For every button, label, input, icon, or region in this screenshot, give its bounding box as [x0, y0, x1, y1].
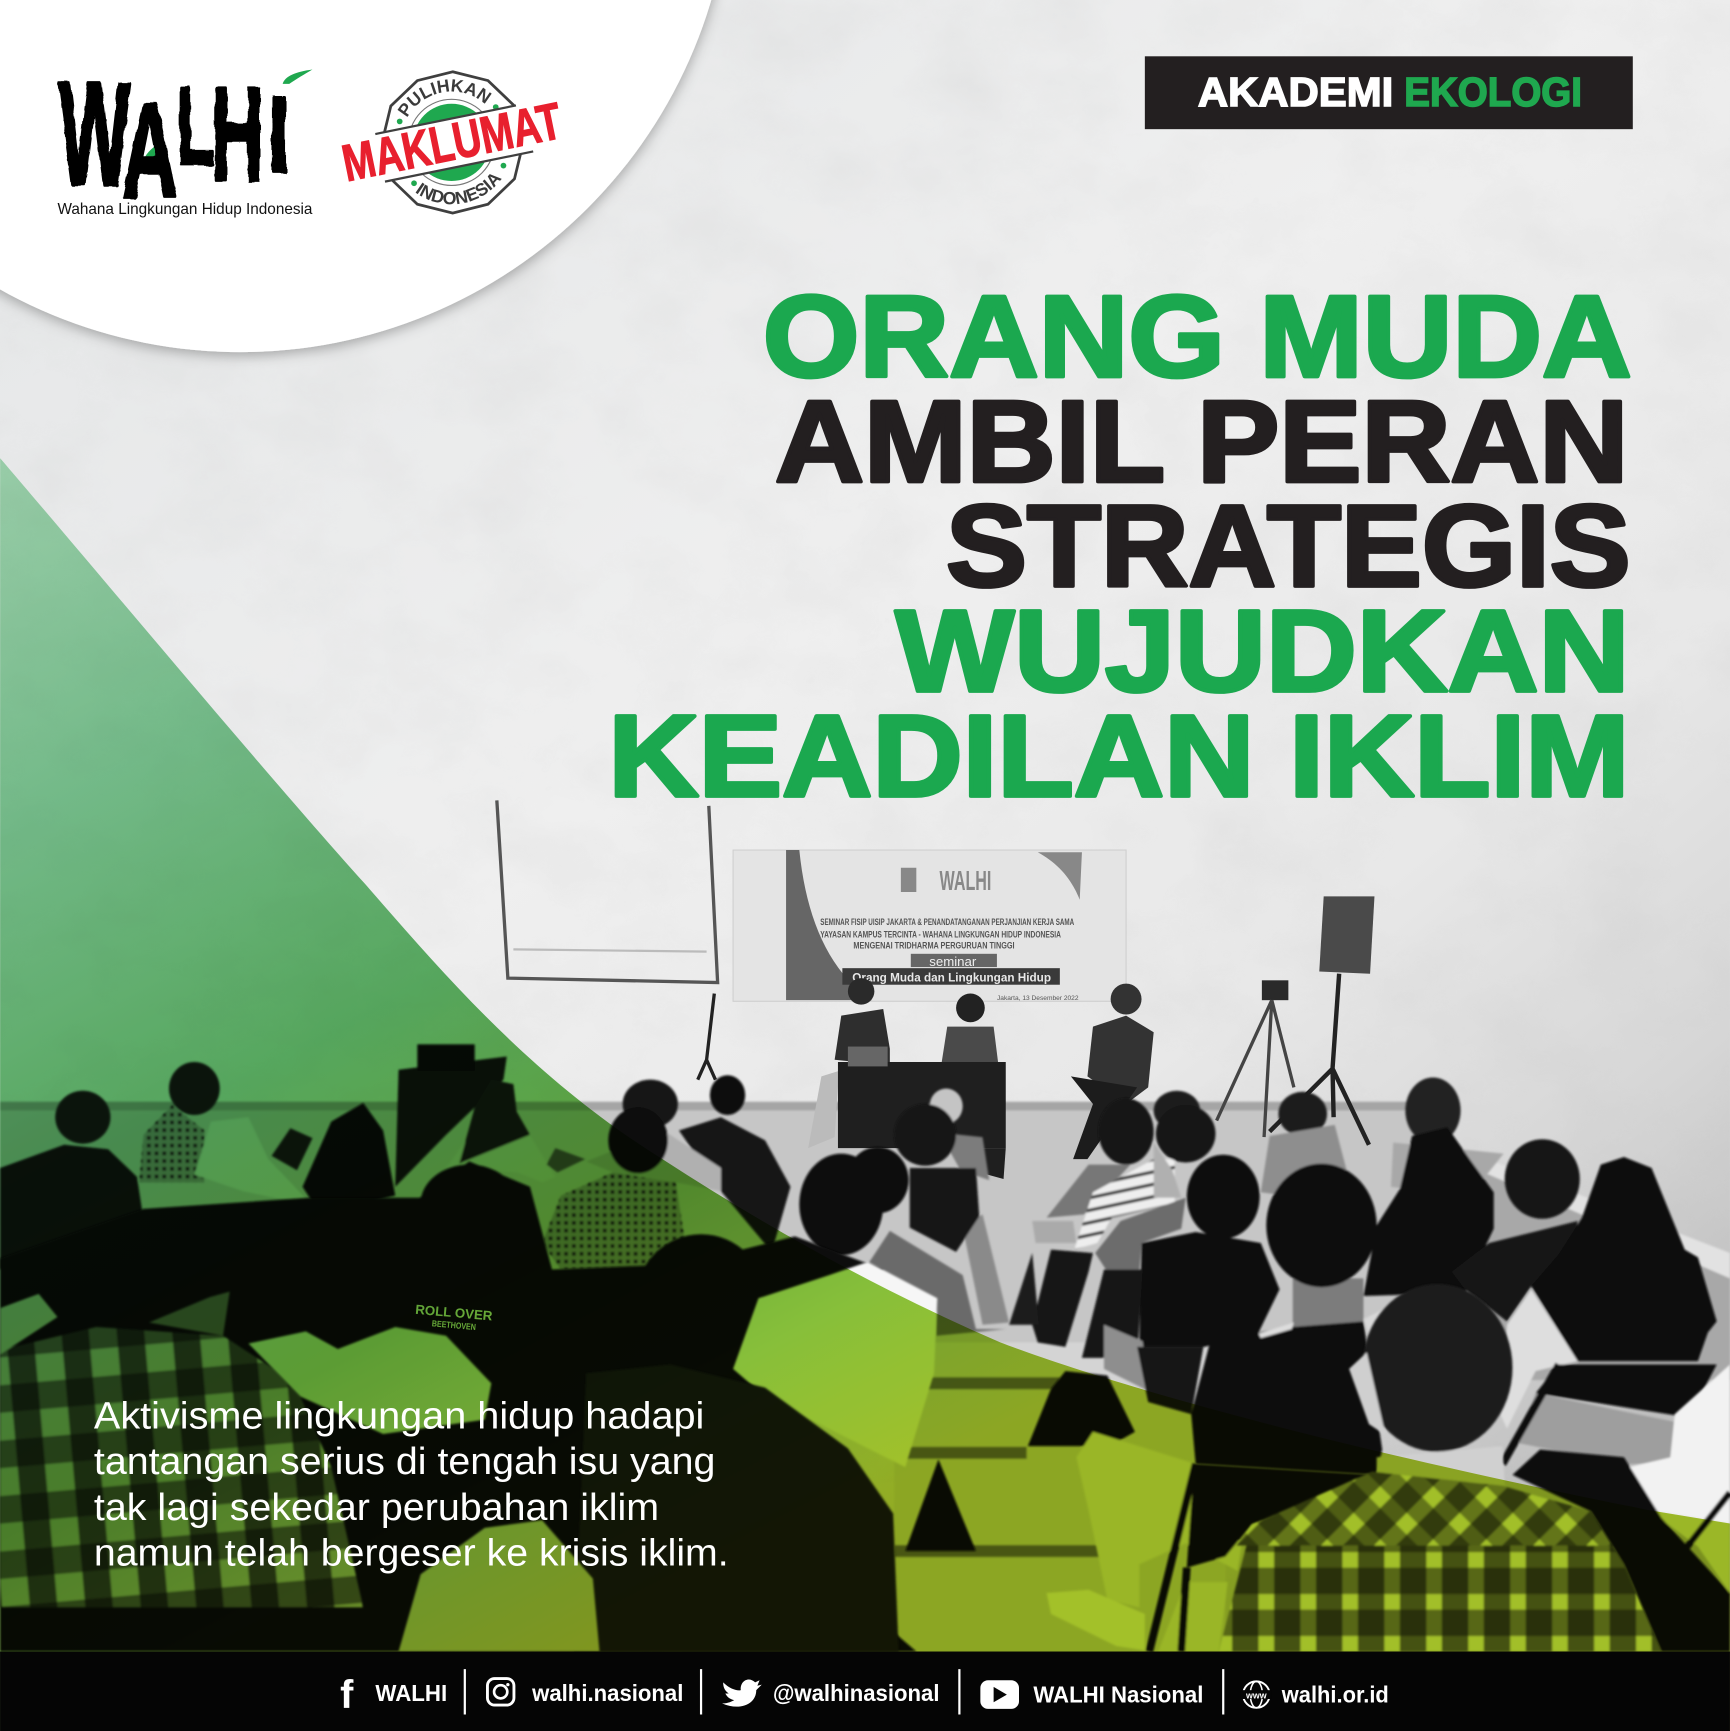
audience silhouettes, left side	[0, 1044, 585, 1270]
footer bar	[0, 1652, 1730, 1731]
Facebook icon and handle: f	[340, 1673, 354, 1717]
seminar banner: YAYASAN KAMPUS TERCINTA - WAHANA LINGKUNGAN HIDUP INDONESIA	[820, 929, 1061, 939]
audience silhouettes, center	[542, 1075, 1009, 1336]
seminar banner: Jakarta, 13 Desember 2022	[997, 995, 1079, 1002]
paragraph line 2: tantangan serius di tengah isu yang	[94, 1441, 715, 1483]
logo tagline: Wahana Lingkungan Hidup Indonesia	[57, 201, 313, 218]
Facebook icon and handle: WALHI	[375, 1680, 447, 1706]
front right audience	[1512, 1364, 1730, 1652]
Facebook icon and handle	[340, 1673, 447, 1717]
YouTube icon and handle: WALHI Nasional	[1033, 1681, 1203, 1707]
logo wordmark: W	[59, 52, 131, 215]
stamp green dots	[397, 104, 506, 186]
seminar photo	[0, 800, 1730, 1663]
stamp top wording: PULIHKAN	[398, 79, 492, 117]
stamp ring	[382, 72, 523, 213]
Twitter icon and handle: @walhinasional	[773, 1680, 940, 1706]
stamp bottom wording: INDONESIA	[416, 174, 502, 204]
light shirt, center right	[733, 1262, 937, 1467]
logo wordmark: A	[121, 75, 178, 226]
paragraph line 1: Aktivisme lingkungan hidup hadapi	[94, 1396, 704, 1438]
logo green leaf	[283, 70, 312, 84]
floor	[0, 1102, 1730, 1663]
printed shirt wording: BEETHOVEN	[431, 1318, 476, 1332]
printed shirt wording: ROLL OVER	[415, 1302, 493, 1323]
seminar banner: MENGENAI TRIDHARMA PERGURUAN TINGGI	[853, 940, 1015, 950]
panel speakers and table	[808, 978, 1154, 1179]
logo wordmark: H	[211, 61, 264, 209]
paragraph line 3: tak lagi sekedar perubahan iklim	[94, 1487, 659, 1529]
foreground plaid shirt	[0, 1292, 363, 1607]
bag in foreground	[399, 1520, 599, 1652]
stamp inner thin ring	[409, 99, 495, 185]
logo wordmark	[59, 52, 289, 226]
title line 2: AMBIL PERAN	[775, 376, 1628, 506]
audience silhouettes, right side	[1009, 1077, 1717, 1475]
YouTube icon and handle	[980, 1680, 1203, 1709]
Instagram icon and handle: walhi.nasional	[531, 1680, 683, 1706]
logo inner green stroke	[140, 146, 161, 168]
header banner: Akademi Ekologi	[1145, 56, 1633, 129]
stamp band and MAKLUMAT wording: MAKLUMAT	[337, 91, 567, 192]
patterned back	[574, 1364, 899, 1652]
title line 1: ORANG MUDA	[763, 271, 1632, 401]
white corner circle	[0, 0, 731, 352]
printed shirt wording	[414, 1302, 493, 1333]
Pulihkan Maklumat Indonesia stamp	[337, 70, 567, 214]
title line 3: STRATEGIS	[946, 481, 1631, 611]
website icon and address	[1241, 1681, 1389, 1708]
main title	[608, 271, 1632, 821]
yellow plaid shirt	[1219, 1284, 1662, 1652]
stamp green disc	[413, 104, 490, 181]
seminar banner	[733, 850, 1126, 1002]
seated person legs and shoe	[905, 1371, 1377, 1652]
logo wordmark: I	[268, 74, 289, 194]
title line 5: KEADILAN IKLIM	[608, 691, 1629, 821]
stamp band and MAKLUMAT wording	[337, 91, 567, 192]
logo wordmark: L	[177, 65, 214, 187]
banner word: Ekologi: EKOLOGI	[1404, 69, 1582, 115]
WALHI logo	[57, 52, 313, 226]
dark foreground crowd mass	[0, 1161, 916, 1652]
light shirt	[248, 1327, 491, 1434]
PA speaker on stand	[1270, 896, 1374, 1145]
whiteboard on wall	[497, 800, 718, 983]
microphone stand	[698, 994, 715, 1080]
camera on tripod	[1217, 980, 1294, 1137]
seminar banner: Orang Muda dan Lingkungan Hidup	[852, 970, 1051, 984]
seminar banner: WALHI	[940, 865, 991, 896]
website icon and address: www	[1245, 1690, 1267, 1700]
body paragraph	[94, 1396, 729, 1574]
seminar banner: seminar	[929, 954, 977, 969]
website icon and address: walhi.or.id	[1281, 1681, 1389, 1707]
seminar banner: SEMINAR FISIP UISIP JAKARTA & PENANDATANGANAN PERJANJIAN KERJA SAMA	[820, 917, 1075, 927]
green diagonal overlay	[0, 442, 1730, 1731]
title line 4: WUJUDKAN	[895, 586, 1629, 716]
paragraph line 4: namun telah bergeser ke krisis iklim.	[94, 1532, 729, 1574]
banner word: Akademi: AKADEMI	[1198, 69, 1393, 115]
